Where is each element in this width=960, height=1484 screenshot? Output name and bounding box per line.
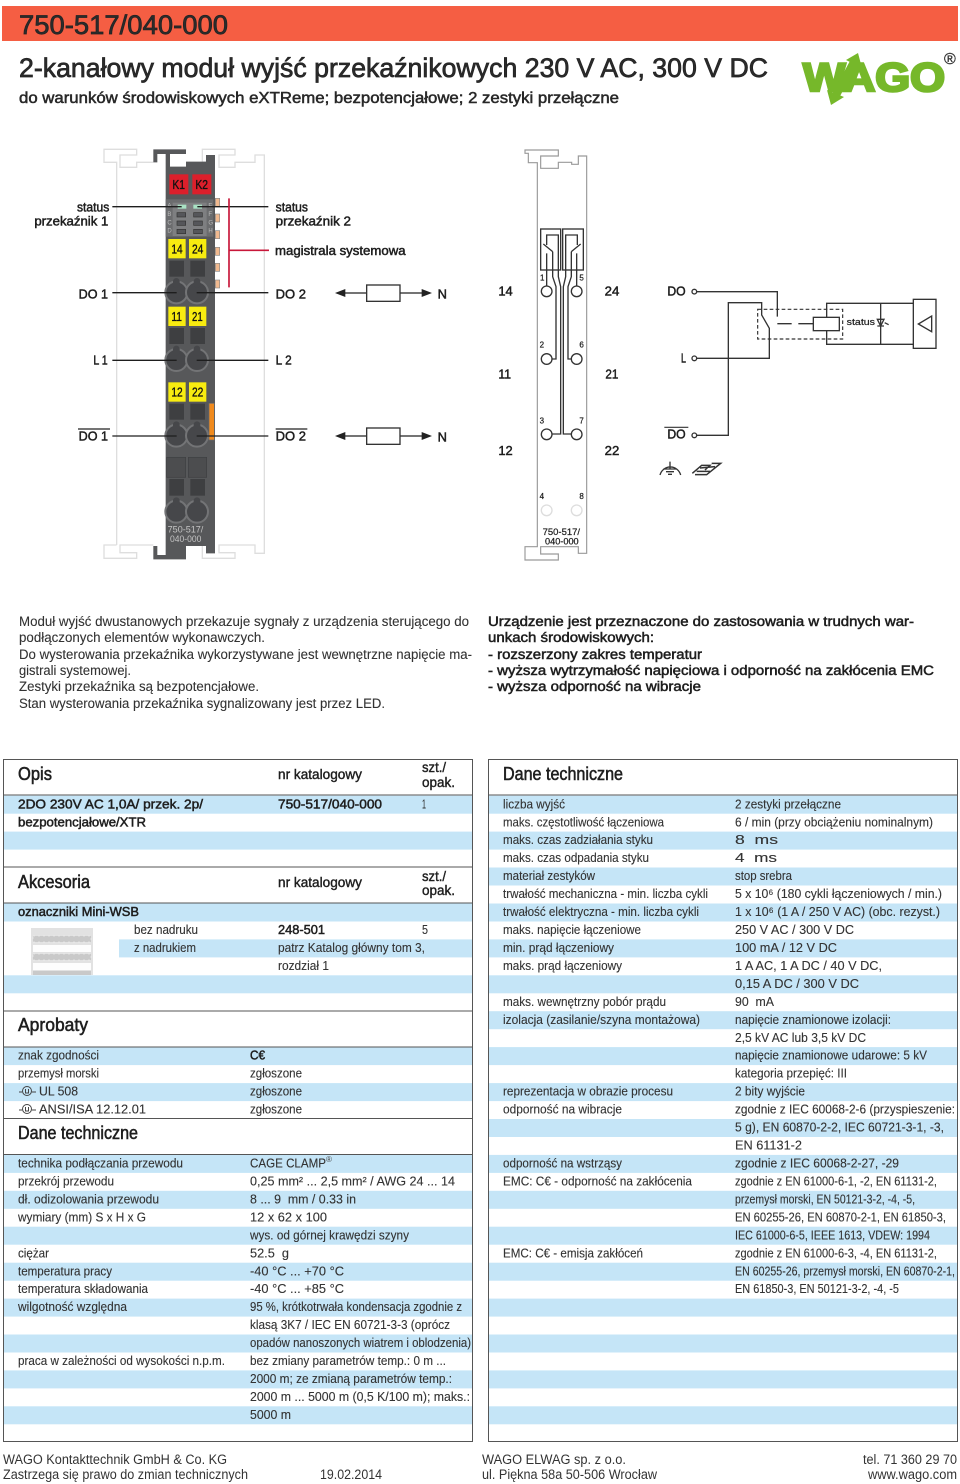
terminal pin numbers: 1 — [540, 274, 545, 283]
footer: WAGO ELWAG sp. z o.o. — [482, 1452, 626, 1467]
yellow terminal tags: 24 — [192, 242, 203, 256]
technical data rows: maks. częstotliwość łączeniowa — [503, 814, 665, 829]
technical data rows: 5 g), EN 60870-2-2, IEC 60721-3-1, -3, — [735, 1120, 944, 1135]
push buttons — [167, 261, 207, 496]
status LED panel — [166, 199, 213, 237]
section: Akcesoria — [18, 868, 455, 973]
section: Dane techniczne left: wys. od górnej krawędzi szyny — [249, 1227, 409, 1242]
section: Dane techniczne left: dł. odizolowania przewodu — [18, 1191, 159, 1206]
technical data rows: 2,5 kV AC lub 3,5 kV DC — [735, 1030, 866, 1045]
technical data rows: 8 ms — [735, 832, 779, 847]
technical data rows: 2 zestyki przełączne — [735, 796, 841, 811]
footer — [3, 1452, 957, 1482]
device labels: DO 1 — [79, 429, 108, 444]
right table stripes — [489, 796, 957, 1424]
relay circuit schematic: DO — [667, 283, 686, 298]
section: Akcesoria: 5 — [422, 922, 428, 937]
description right: unkach środowiskowych: — [488, 630, 654, 645]
device labels: DO 1 — [79, 286, 108, 301]
technical data rows: 1 x 10⁶ (1 A / 250 V AC) (obc. rezyst.) — [735, 904, 940, 919]
description left: Zestyki przekaźnika są bezpotencjałowe. — [19, 679, 259, 694]
terminal labels: 14 — [498, 283, 513, 298]
relay keys: K1 — [172, 178, 185, 192]
footer: Zastrzega się prawo do zmian technicznych — [3, 1467, 248, 1482]
section: Opis: bezpotencjałowe/XTR — [18, 814, 146, 829]
load arrow inverted DO 2: N — [438, 430, 447, 445]
section: Dane techniczne left: 52.5 g — [250, 1245, 289, 1260]
footer: 19.02.2014 — [320, 1467, 382, 1482]
panel: left table — [4, 759, 472, 1442]
section: Akcesoria: z nadrukiem — [134, 940, 196, 955]
footer: WAGO Kontakttechnik GmbH & Co. KG — [3, 1452, 227, 1467]
picture: Mini-WSB markers — [31, 928, 93, 975]
section: Akcesoria: patrz Katalog główny tom 3, — [278, 940, 425, 955]
section: Aprobaty: zgłoszone — [250, 1102, 302, 1117]
relay contacts — [541, 229, 583, 287]
relay circuit schematic: status — [847, 317, 875, 327]
section: Akcesoria: szt./ — [422, 868, 446, 884]
technical data rows: 4 ms — [735, 850, 778, 865]
device labels: status — [276, 200, 308, 215]
relay circuit schematic — [664, 283, 936, 441]
terminal pin numbers: 2 — [540, 341, 545, 350]
device marking: 750-517/ — [168, 525, 204, 535]
load arrow inverted DO 2 — [335, 428, 447, 445]
status LED panel: E — [208, 203, 212, 209]
section: Aprobaty: przemysł morski — [18, 1066, 99, 1081]
panel: right table — [488, 760, 958, 1442]
conductor traces — [552, 270, 572, 434]
section: Akcesoria: Akcesoria — [18, 872, 91, 892]
device marking: 040-000 — [170, 534, 201, 544]
relay keys — [169, 174, 211, 194]
technical data rows: EN 61850-3, EN 50121-3-2, -4, -5 — [735, 1281, 899, 1296]
technical data rows: 250 V AC / 300 V DC — [735, 922, 854, 937]
section: Dane techniczne left: ® — [326, 1155, 332, 1164]
status LED panel: D — [167, 229, 172, 235]
device illustration — [34, 149, 447, 559]
title bar: 750-517/040-000 — [19, 10, 228, 40]
technical data rows — [503, 796, 955, 1296]
terminal circles — [541, 286, 582, 516]
technical data rows: 90 mA — [735, 994, 774, 1009]
WAGO logo: WAGO — [803, 56, 945, 100]
footer: www.wago.com — [867, 1467, 957, 1482]
device labels: przekaźnik 2 — [276, 214, 351, 229]
yellow terminal tags — [168, 239, 206, 402]
section: Aprobaty: ANSI/ISA 12.12.01 — [39, 1102, 146, 1117]
section: Dane techniczne left: temperatura składowania — [18, 1281, 149, 1296]
section: Dane techniczne left: ciężar — [18, 1245, 50, 1260]
section: Aprobaty — [18, 1015, 302, 1117]
section: Akcesoria: oznaczniki Mini-WSB — [18, 904, 139, 919]
section: Opis: nr katalogowy — [278, 766, 362, 782]
section: Akcesoria: opak. — [422, 882, 455, 898]
device labels: status — [77, 200, 110, 215]
technical data rows: trwałość mechaniczna - min. liczba cykli — [503, 886, 708, 901]
technical data rows: maks. wewnętrzny pobór prądu — [503, 994, 666, 1009]
footer: ul. Piękna 58a 50-506 Wrocław — [482, 1467, 657, 1482]
section: Akcesoria: 248-501 — [278, 922, 325, 937]
section: Opis: 750-517/040-000 — [278, 796, 382, 811]
section: Dane techniczne left: 2000 m; ze zmianą parametrów temp.: — [250, 1371, 452, 1386]
leader lines — [112, 207, 268, 436]
technical data rows: 5 x 10⁶ (180 cykli łączeniowych / min.) — [735, 886, 942, 901]
terminal pin numbers: 3 — [540, 416, 545, 425]
technical data rows: trwałość elektryczna - min. liczba cykli — [503, 904, 699, 919]
device labels: przekaźnik 1 — [34, 214, 108, 229]
section: Aprobaty: UL 508 — [39, 1084, 78, 1099]
subheading: do warunków środowiskowych eXTReme; bezpotencjałowe; 2 zestyki przełączne — [19, 90, 619, 107]
terminal pin numbers — [540, 274, 584, 501]
section: Dane techniczne left: 8 ... 9 mm / 0.33 in — [250, 1191, 356, 1206]
module marking — [543, 527, 580, 546]
device labels — [34, 200, 406, 444]
section: Dane techniczne left: klasą 3K7 / IEC EN 60721-3-3 (oprócz — [250, 1317, 450, 1332]
section: Aprobaty: zgłoszone — [250, 1084, 302, 1099]
technical data rows: odporność na wibracje — [503, 1102, 622, 1117]
technical data rows: 100 mA / 12 V DC — [735, 940, 837, 955]
section: Dane techniczne left: temperatura pracy — [18, 1263, 112, 1278]
status LED panel: F — [208, 212, 212, 218]
description left: podłączonych elementów wykonawczych. — [19, 630, 265, 645]
description right: - wyższa odporność na wibracje — [488, 679, 701, 694]
device labels: L 2 — [276, 353, 292, 368]
yellow terminal tags: 14 — [171, 242, 183, 256]
terminal labels: 22 — [605, 443, 619, 458]
section: Aprobaty: zgłoszone — [250, 1066, 302, 1081]
left table stripes — [4, 796, 472, 1424]
section: Akcesoria: nr katalogowy — [278, 874, 362, 890]
terminal labels: 24 — [605, 283, 619, 298]
technical data rows: maks. prąd łączeniowy — [503, 958, 622, 973]
relay circuit schematic: DO — [667, 426, 686, 441]
technical data rows: 2 bity wyjście — [735, 1084, 805, 1099]
yellow terminal tags: 21 — [192, 310, 203, 324]
system bus contacts — [215, 198, 220, 288]
section: Opis: 2DO 230V AC 1,0A/ przek. 2p/ — [18, 796, 203, 811]
device marking — [168, 525, 204, 544]
section: Dane techniczne left: 95 %, krótkotrwała kondensacja zgodnie z — [250, 1299, 462, 1314]
technical data rows: EMC: C€ - odporność na zakłócenia — [503, 1174, 693, 1188]
section: Dane techniczne left: CAGE CLAMP — [250, 1156, 326, 1170]
technical data rows: liczba wyjść — [503, 796, 565, 811]
section: Akcesoria: rozdział 1 — [278, 958, 329, 973]
wire clamps — [165, 281, 208, 523]
section: Dane techniczne left — [17, 1123, 471, 1422]
technical data rows: napięcie znamionowe izolacji: — [735, 1012, 891, 1027]
heading: Dane techniczne: Dane techniczne — [503, 764, 623, 784]
status LED panel: G — [208, 221, 213, 227]
section: Dane techniczne left: przekrój przewodu — [18, 1174, 114, 1188]
icon: UL marks — [19, 1086, 36, 1114]
device labels: DO 2 — [276, 429, 306, 444]
technical data rows: przemysł morski, EN 50121-3-2, -4, -5, — [735, 1191, 915, 1206]
section: Dane techniczne left: 5000 m — [250, 1407, 291, 1422]
terminal labels: 21 — [605, 367, 618, 382]
description left: Do wysterowania przekaźnika wykorzystywane jest wewnętrzne napięcie ma- — [19, 647, 472, 662]
relay keys: K2 — [195, 178, 208, 192]
device labels: magistrala systemowa — [275, 243, 406, 258]
heading: 2-kanałowy moduł wyjść przekaźnikowych 230 V AC, 300 V DC — [19, 53, 768, 83]
clamp slots — [173, 278, 200, 507]
technical data rows: reprezentacja w obrazie procesu — [503, 1084, 673, 1099]
technical data rows: stop srebra — [735, 868, 793, 883]
WAGO logo — [803, 51, 956, 105]
section: Aprobaty: C€ — [250, 1048, 266, 1063]
module outline — [525, 150, 587, 560]
status LED panel: B — [167, 212, 171, 218]
terminal pin numbers: 7 — [579, 416, 584, 425]
section: Opis: szt./ — [422, 759, 446, 775]
title bar — [2, 6, 958, 41]
description left: Moduł wyjść dwustanowych przekazuje sygnały z urządzenia sterującego do — [19, 614, 469, 629]
section: Opis: opak. — [422, 774, 455, 790]
technical data rows: materiał zestyków — [503, 868, 596, 883]
section: Dane techniczne left: opadów nanoszonych wiatrem i oblodzenia) — [250, 1335, 471, 1350]
technical data rows: min. prąd łączeniowy — [503, 940, 614, 955]
neighbouring modules ghost outline — [104, 149, 264, 558]
device body — [153, 149, 215, 559]
status LED panel: A — [167, 203, 171, 209]
technical data rows: EMC: C€ - emisja zakłóceń — [503, 1245, 643, 1260]
device labels: DO 2 — [276, 286, 306, 301]
section: Dane techniczne left: 12 x 62 x 100 — [250, 1209, 327, 1224]
technical data rows: 1 A AC, 1 A DC / 40 V DC, — [735, 958, 882, 973]
yellow terminal tags: 22 — [192, 386, 203, 400]
description right: Urządzenie jest przeznaczone do zastosowania w trudnych war- — [488, 614, 914, 629]
technical data rows: maks. czas zadziałania styku — [503, 832, 653, 847]
section: Opis — [18, 759, 455, 829]
system bus bracket — [229, 198, 269, 287]
orange release tab — [209, 403, 214, 440]
technical data rows: izolacja (zasilanie/szyna montażowa) — [503, 1012, 700, 1027]
section: Dane techniczne left: technika podłączania przewodu — [18, 1156, 183, 1170]
module marking: 750-517/ — [543, 527, 580, 537]
section: Dane techniczne left: 2000 m ... 5000 m (0,5 K/100 m); maks.: — [250, 1389, 470, 1404]
section: Dane techniczne left: praca w zależności od wysokości n.p.m. — [18, 1353, 225, 1368]
terminal labels: 12 — [498, 443, 513, 458]
description left — [19, 614, 472, 711]
load arrow DO 2 — [335, 285, 447, 301]
section: Dane techniczne left: 0,25 mm² ... 2,5 mm² / AWG 24 ... 14 — [250, 1174, 455, 1188]
status LED panel: C — [167, 221, 172, 227]
technical data rows: maks. czas odpadania styku — [503, 850, 649, 865]
section: Opis: Opis — [18, 764, 52, 784]
terminal wiring diagram — [498, 150, 936, 560]
section: Dane techniczne left: bez zmiany parametrów temp.: 0 m ... — [250, 1353, 446, 1368]
technical data rows: zgodnie z IEC 60068-2-27, -29 — [735, 1156, 899, 1170]
terminal pin numbers: 4 — [540, 492, 545, 501]
terminal pin numbers: 6 — [579, 341, 584, 350]
right table frame — [488, 760, 958, 1442]
description right: - wyższa wytrzymałość napięciowa i odporność na zakłócenia EMC — [488, 663, 934, 678]
icon: DIN rail — [692, 463, 721, 475]
terminal labels — [498, 283, 619, 458]
section: Dane techniczne left: wymiary (mm) S x H x G — [17, 1209, 146, 1224]
technical data rows: maks. napięcie łączeniowe — [503, 922, 641, 937]
terminal labels: 11 — [498, 367, 511, 382]
section: Aprobaty: znak zgodności — [18, 1048, 99, 1063]
yellow terminal tags: 12 — [171, 386, 183, 400]
description left: Stan wysterowania przekaźnika sygnalizowany jest przez LED. — [19, 696, 385, 711]
description right: - rozszerzony zakres temperatur — [488, 647, 703, 662]
load arrow DO 2: N — [438, 286, 447, 301]
yellow terminal tags: 11 — [171, 310, 182, 324]
technical data rows: EN 61131-2 — [735, 1138, 802, 1152]
technical data rows: odporność na wstrząsy — [503, 1156, 622, 1170]
device labels: L 1 — [93, 353, 108, 368]
status LED panel: H — [208, 229, 213, 235]
section: Opis: 1 — [422, 796, 426, 811]
section: Aprobaty: Aprobaty — [18, 1015, 88, 1035]
section: Dane techniczne left: wilgotność względna — [17, 1299, 128, 1314]
left table frame — [4, 760, 472, 1442]
description left: gistrali systemowej. — [19, 663, 131, 678]
technical data rows: 0,15 A DC / 300 V DC — [735, 976, 859, 991]
icon: ground symbol — [660, 462, 681, 475]
section: Dane techniczne left: -40 °C ... +85 °C — [250, 1281, 344, 1296]
WAGO logo: ® — [944, 51, 956, 68]
relay circuit schematic: L — [681, 350, 686, 365]
section: Dane techniczne left: -40 °C ... +70 °C — [250, 1263, 344, 1278]
section: Dane techniczne left: Dane techniczne — [18, 1123, 138, 1143]
description right — [488, 614, 934, 694]
technical data rows: 6 / min (przy obciążeniu nominalnym) — [735, 814, 933, 829]
terminal pin numbers: 5 — [579, 274, 584, 283]
section: Akcesoria: bez nadruku — [134, 922, 198, 937]
module marking: 040-000 — [545, 536, 579, 546]
technical data rows: kategoria przepięć: III — [735, 1066, 847, 1081]
technical data rows: napięcie znamionowe udarowe: 5 kV — [735, 1048, 927, 1063]
terminal pin numbers: 8 — [579, 492, 584, 501]
